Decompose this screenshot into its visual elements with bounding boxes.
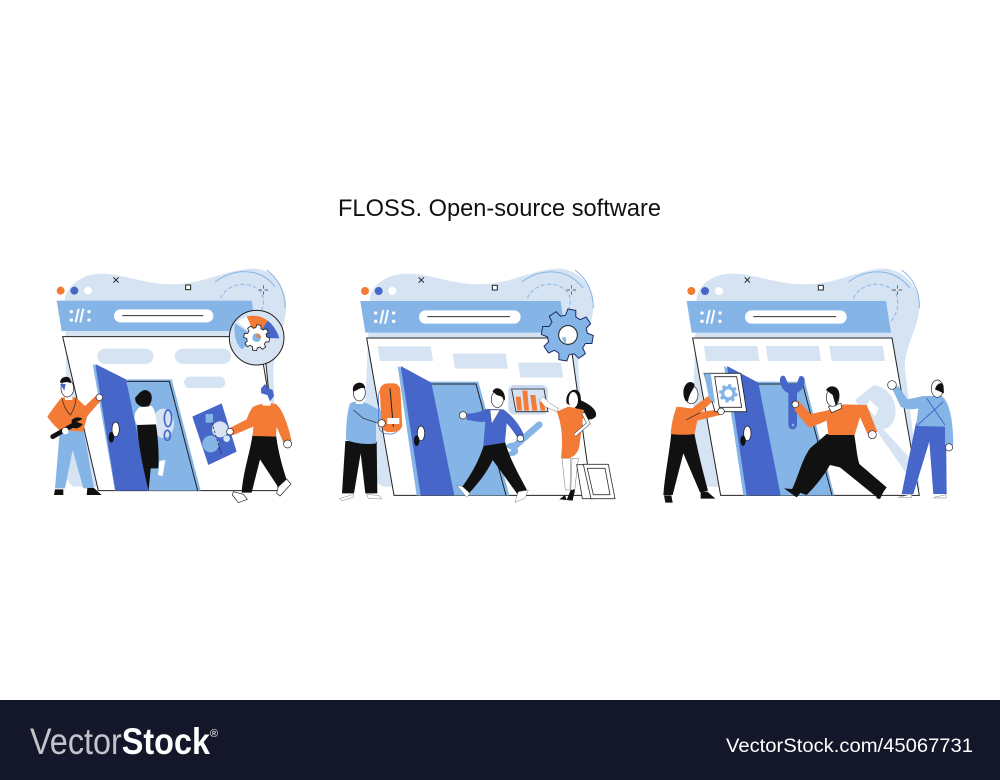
wrench [505, 425, 539, 456]
panel: right illustration [663, 269, 953, 503]
title: FLOSS. Open-source software [338, 195, 661, 222]
footer logo: VectorStock [30, 721, 210, 762]
pale wrench shape [855, 385, 912, 475]
running man in orange [784, 386, 887, 499]
woman in orange dress [539, 390, 596, 501]
content placeholders [704, 346, 885, 361]
man holding framed gear [663, 373, 747, 503]
background blob [690, 269, 920, 490]
page window [693, 338, 919, 495]
page window [367, 338, 592, 495]
decorative arcs and marks [113, 270, 285, 310]
woman walking through door [135, 390, 174, 491]
browser bar [57, 301, 257, 331]
page window [63, 337, 278, 491]
decorative arcs and marks [419, 270, 593, 310]
window dots [57, 287, 92, 295]
poster card [192, 403, 237, 465]
panel: centre illustration [339, 269, 615, 502]
doorway [126, 379, 201, 491]
running man in blazer [457, 388, 528, 502]
door [398, 366, 454, 495]
browser bar [360, 301, 565, 333]
content placeholders [97, 349, 231, 388]
doorway [430, 382, 509, 495]
gear [541, 309, 593, 361]
background blob [363, 269, 593, 490]
registered mark: ® [210, 728, 218, 740]
footer band [0, 700, 1000, 780]
man with slider [339, 383, 403, 501]
blue wrench [780, 376, 805, 426]
picture frames [577, 464, 615, 499]
content placeholders [378, 346, 563, 378]
window dots [361, 287, 396, 295]
door [724, 366, 781, 495]
browser bar [687, 301, 891, 333]
door [93, 364, 149, 491]
doorway [757, 382, 834, 495]
man holding gauge [227, 384, 292, 503]
bar chart [508, 385, 548, 414]
footer image id: VectorStock.com/45067731 [726, 736, 973, 757]
decorative arcs and marks [745, 270, 919, 322]
panel: left illustration [47, 269, 292, 503]
magnifier gauge [229, 310, 284, 388]
man in overalls [888, 380, 953, 498]
window dots [687, 287, 723, 295]
background blob [65, 269, 286, 490]
man with wrench [47, 377, 103, 495]
